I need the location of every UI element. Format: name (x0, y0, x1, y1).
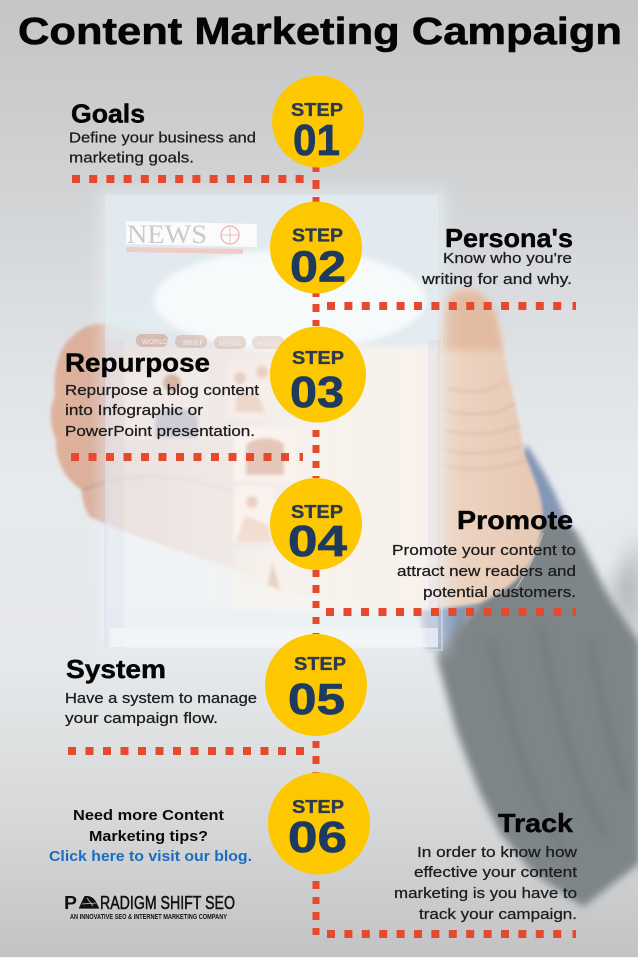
article thumbnails (125, 360, 298, 608)
news banner (126, 220, 257, 254)
dashed connector lines (68, 167, 576, 938)
text block: goals: marketing goals. (69, 150, 194, 166)
text block: personas: Know who you're (443, 250, 572, 267)
text block: repurpose (65, 348, 260, 440)
text block: system (65, 654, 257, 727)
title: Content Marketing Campaign (18, 11, 622, 53)
text block: goals: Define your business and (69, 130, 256, 146)
text block: goals (69, 98, 256, 166)
step 02 badge: STEP (292, 224, 343, 246)
step 06 badge: 06 (288, 813, 347, 862)
step 06 badge (268, 772, 370, 874)
text block: personas (421, 223, 573, 288)
text block: track: track your campaign. (419, 906, 577, 923)
text block: track: In order to know how (417, 844, 577, 861)
text block: repurpose: Repurpose (65, 348, 210, 378)
tablet nav tabs: BRIEF (183, 340, 204, 347)
callout: blog link (49, 808, 252, 865)
icon: logo shell (78, 895, 100, 909)
tablet nav tabs: BLOGS (257, 341, 281, 348)
tablet nav tabs (136, 334, 284, 349)
step 03 badge (270, 326, 366, 422)
news banner: NEWS (127, 220, 207, 249)
logo: Paradigm Shift SEO: AN INNOVATIVE SEO & INTERNET MARKETING COMPANY (70, 914, 227, 921)
text block: promote: Promote (457, 505, 573, 535)
text block: track: marketing is you have to (394, 885, 577, 902)
step 05 badge: 05 (288, 675, 345, 724)
text block: repurpose: Repurpose a blog content (65, 382, 260, 399)
callout: blog link: Need more Content (73, 808, 224, 824)
text block: personas: Persona's (445, 223, 573, 253)
text block: repurpose: into Infographic or (65, 402, 203, 419)
text block: track (394, 808, 578, 923)
logo: Paradigm Shift SEO: RADIGM SHIFT SEO (100, 893, 235, 913)
step 03 badge: STEP (292, 347, 344, 368)
tablet news panel (98, 188, 448, 654)
step 04 badge: 04 (288, 517, 348, 566)
text block: personas: writing for and why. (421, 271, 572, 288)
text block: repurpose: PowerPoint presentation. (65, 423, 255, 440)
text block: promote: Promote your content to (392, 542, 576, 559)
step 02 badge: 02 (290, 242, 346, 292)
sweater sleeve (420, 445, 638, 907)
hand (51, 288, 543, 609)
step 01 badge: 01 (293, 116, 340, 165)
tablet nav tabs: WORLD (142, 339, 168, 346)
callout: blog link: Marketing tips? (89, 829, 208, 845)
text block: promote: potential customers. (423, 584, 576, 601)
text block: system: System (66, 654, 166, 684)
text block: track: effective your content (414, 864, 578, 881)
step 05 badge (265, 634, 367, 736)
tablet nav tabs: MEDIA (219, 341, 242, 348)
text block: track: Track (498, 808, 574, 838)
callout: blog link: Click here to visit our blog. (49, 849, 252, 865)
step 04 badge (270, 478, 362, 570)
logo: Paradigm Shift SEO (64, 893, 235, 921)
step 03 badge: 03 (290, 368, 344, 417)
step 04 badge: STEP (291, 501, 343, 522)
step 01 badge (272, 76, 364, 168)
text block: promote: attract new readers and (397, 563, 576, 580)
step 01 badge: STEP (291, 99, 343, 120)
text block: system: your campaign flow. (65, 710, 218, 727)
step 06 badge: STEP (292, 796, 344, 817)
step 02 badge (270, 202, 362, 294)
step 05 badge: STEP (294, 653, 346, 674)
logo: Paradigm Shift SEO: P (64, 893, 77, 913)
text block: promote (392, 505, 576, 601)
text block: system: Have a system to manage (65, 690, 257, 707)
text block: goals: Goals (71, 98, 145, 128)
